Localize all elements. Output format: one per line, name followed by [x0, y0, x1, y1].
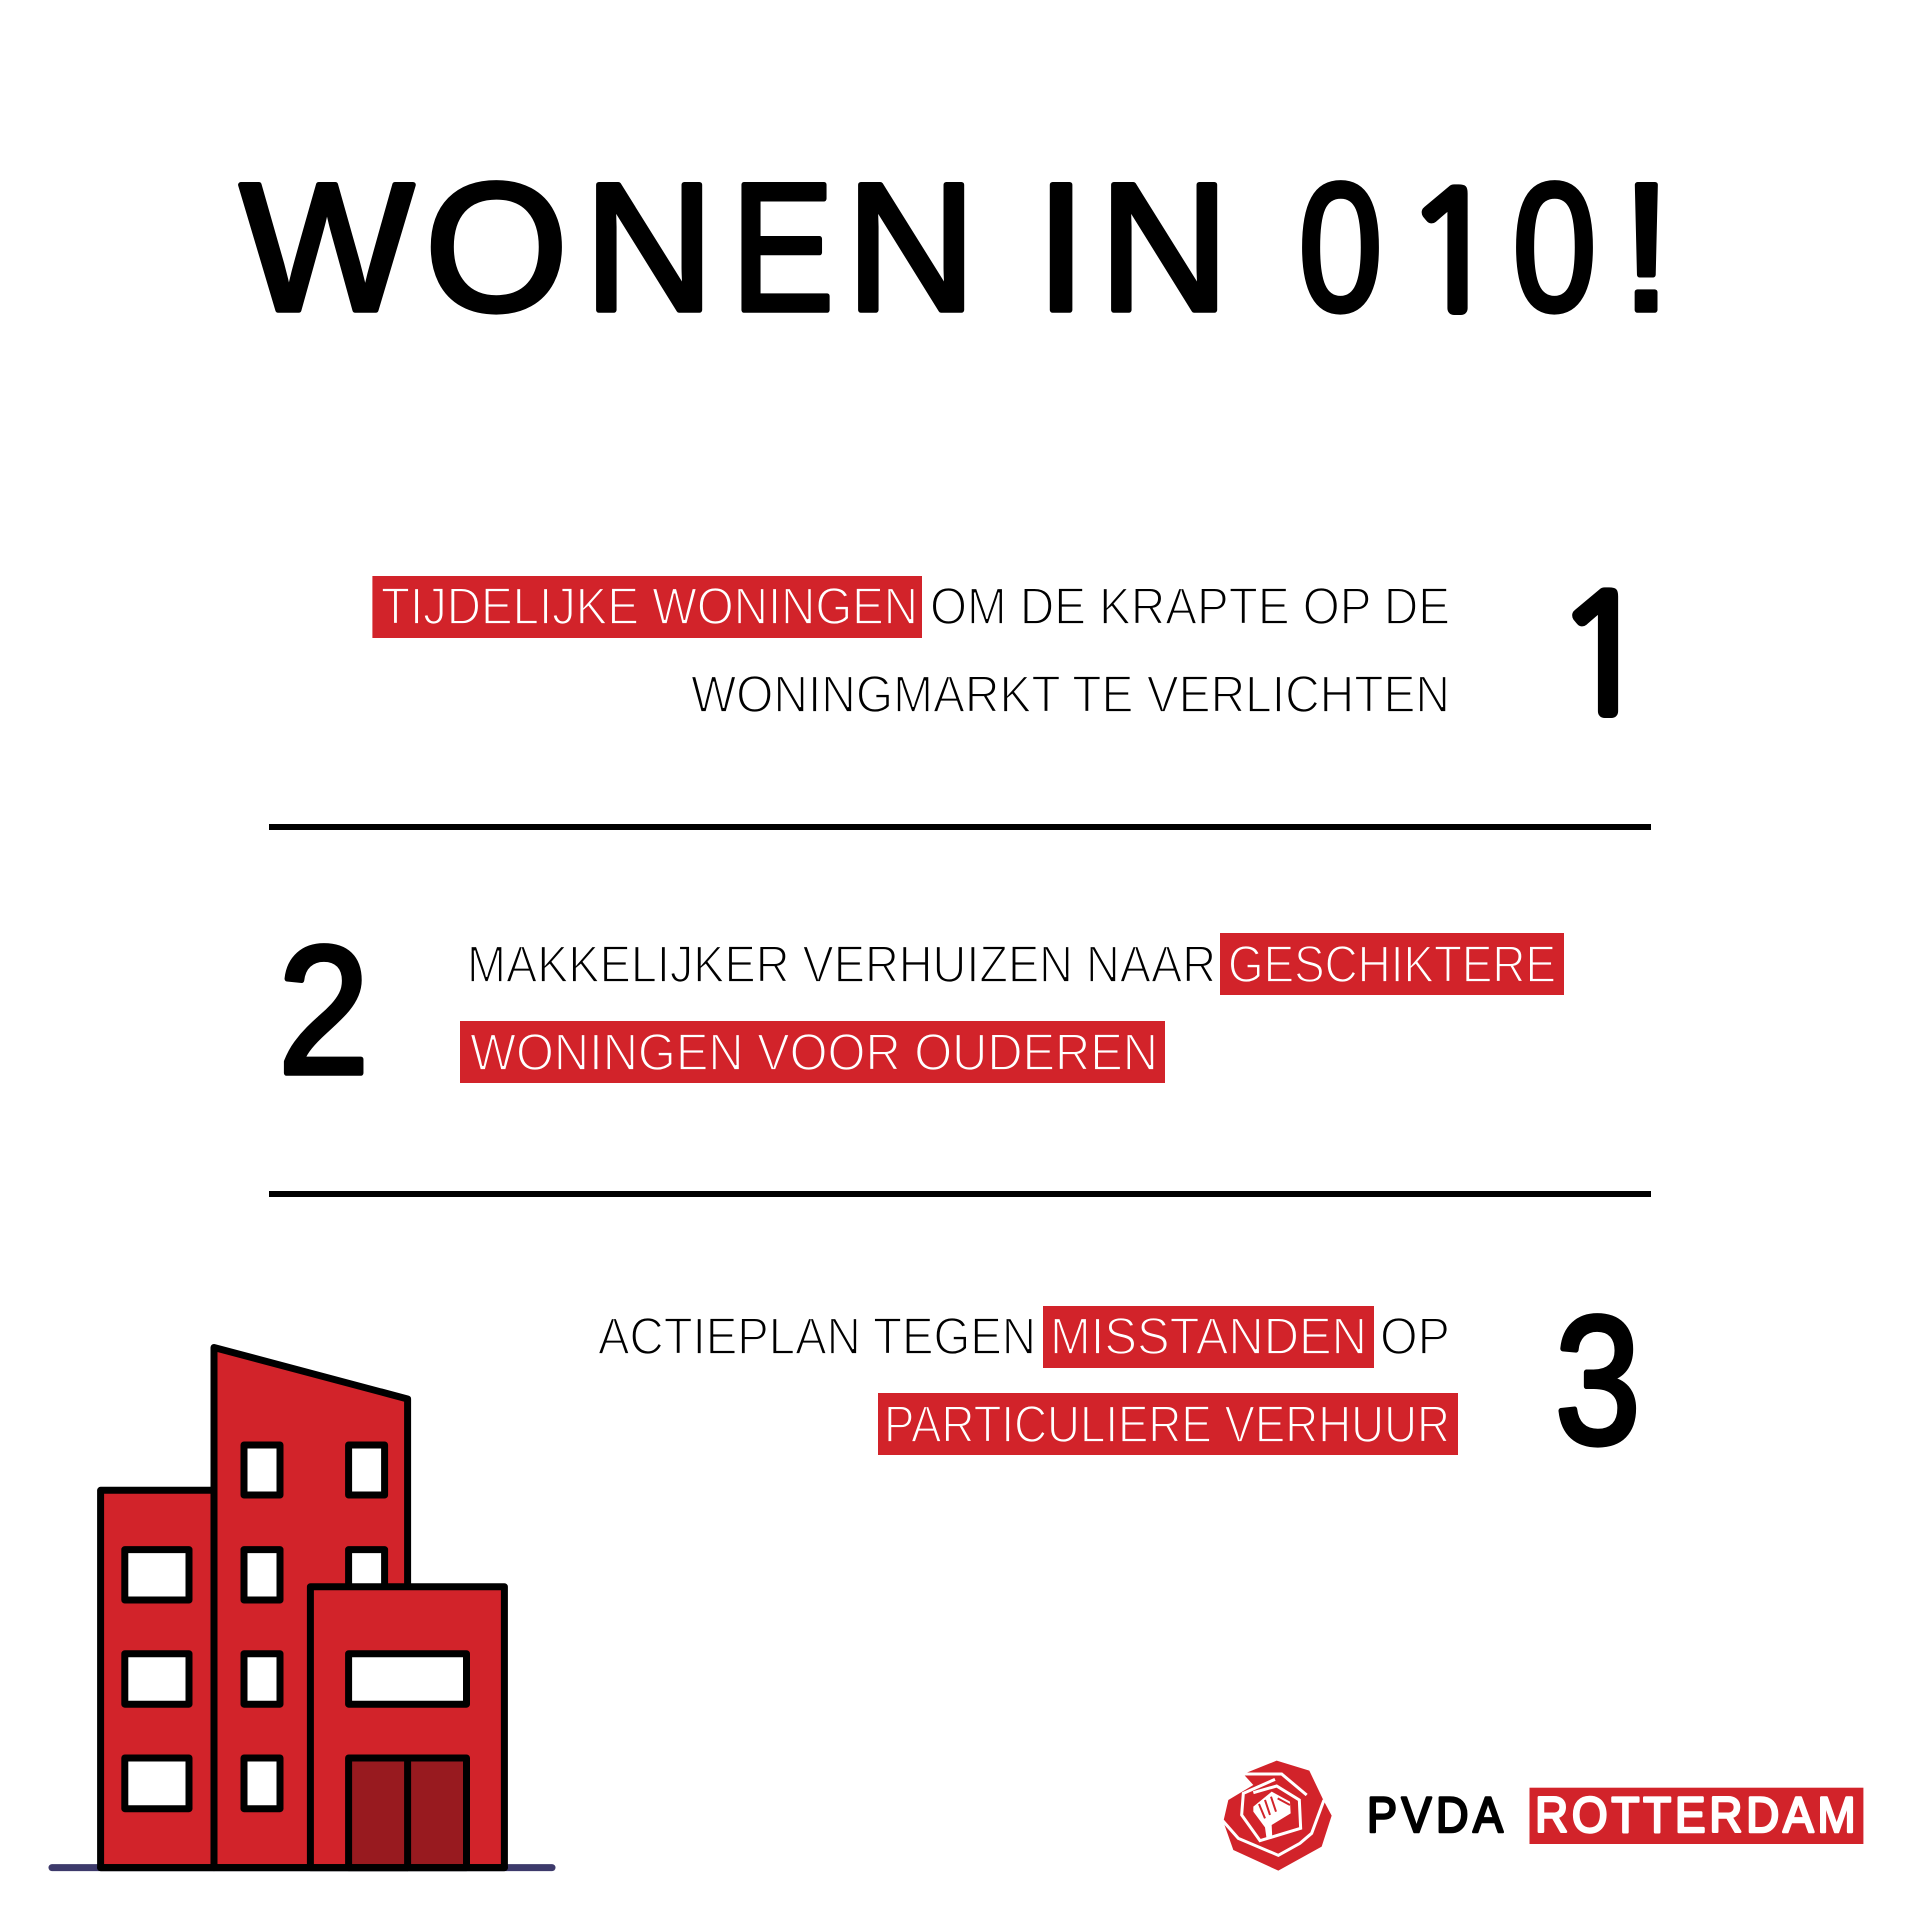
title: N — [1099, 145, 1229, 349]
text: om de krapte op de: OM DE KRAPTE OP DE — [930, 578, 1450, 636]
left building — [101, 1490, 214, 1868]
logo: PvdA rose — [1223, 1761, 1332, 1871]
logo: Rotterdam tag: ROTTERDAM — [1535, 1788, 1859, 1843]
title: N — [846, 145, 976, 349]
title: N — [584, 145, 714, 349]
divider — [269, 1191, 1651, 1197]
text: woningen voor ouderen: WONINGEN VOOR OUDEREN — [470, 1024, 1158, 1082]
title: 1 — [1403, 171, 1502, 334]
title: 0 — [1512, 145, 1596, 349]
highlight: tijdelijke woningen — [372, 576, 922, 638]
divider — [269, 824, 1651, 830]
text: woningmarkt te verlichten: WONINGMARKT TE VERLICHTEN — [691, 666, 1450, 724]
text: particuliere verhuur: PARTICULIERE VERHUUR — [884, 1396, 1450, 1454]
front building — [310, 1587, 504, 1868]
title: ! — [1621, 145, 1672, 349]
highlight: geschiktere — [1220, 933, 1564, 995]
text: makkelijker verhuizen naar: MAKKELIJKER VERHUIZEN NAAR — [467, 936, 1216, 994]
highlight: misstanden — [1043, 1306, 1374, 1368]
title — [240, 145, 1672, 349]
icon: red apartment buildings — [52, 1348, 552, 1868]
title: 0 — [1298, 145, 1382, 349]
text: op: OP — [1380, 1308, 1450, 1366]
ground edge — [101, 1864, 504, 1871]
title: I — [1036, 145, 1086, 349]
logo: PVDA: PVDA — [1367, 1788, 1508, 1844]
text: misstanden: MISSTANDEN — [1050, 1308, 1367, 1366]
title: W — [240, 145, 414, 349]
number 1: 1 — [1554, 574, 1652, 737]
text: actieplan tegen: ACTIEPLAN TEGEN — [598, 1308, 1036, 1366]
number 2: 2 — [278, 908, 369, 1112]
item 3 — [598, 1278, 1640, 1482]
middle tower — [214, 1348, 408, 1868]
ground line — [52, 1864, 552, 1871]
number 3: 3 — [1555, 1278, 1640, 1482]
text: tijdelijke woningen: TIJDELIJKE WONINGEN — [381, 578, 918, 636]
text: geschiktere: GESCHIKTERE — [1228, 936, 1556, 994]
title: O — [425, 145, 568, 349]
item 1 — [372, 574, 1652, 737]
item 2 — [278, 908, 1564, 1112]
highlight: particuliere verhuur — [878, 1393, 1458, 1455]
title: E — [731, 145, 834, 349]
highlight: woningen voor ouderen — [460, 1021, 1165, 1083]
